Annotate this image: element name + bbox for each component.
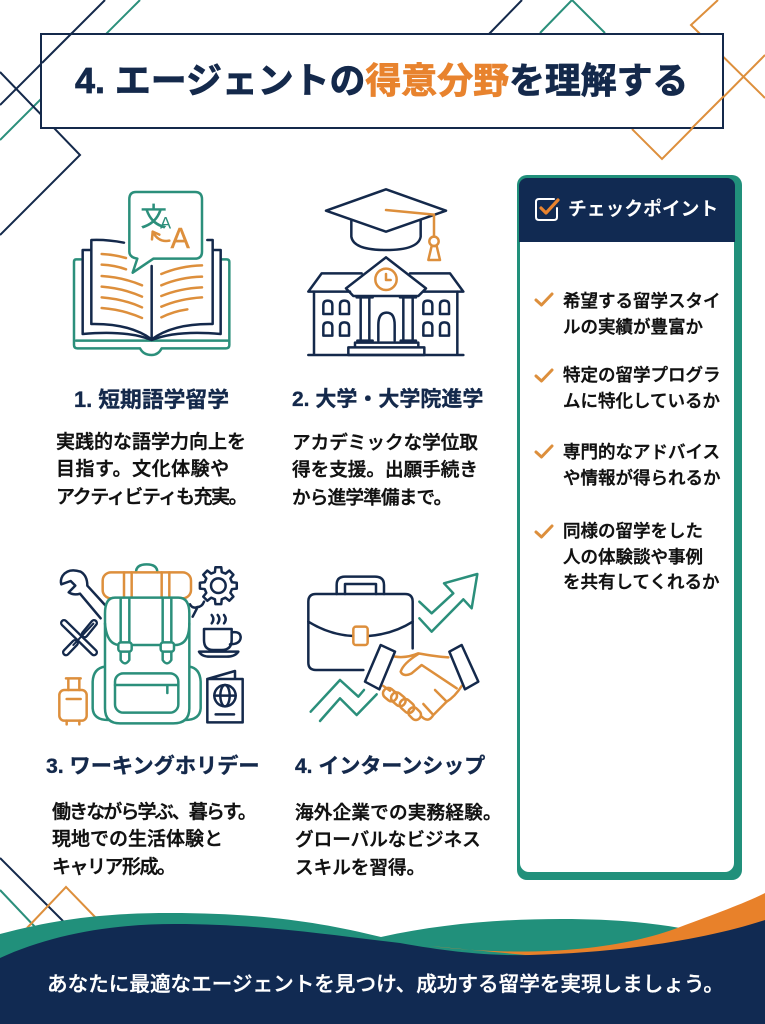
text: university: から進学準備まで。 bbox=[292, 487, 451, 508]
item text bbox=[563, 365, 720, 411]
check item 3 bbox=[534, 442, 720, 488]
item text: 特定の留学プログラ bbox=[563, 365, 720, 385]
text: internship: スキルを習得。 bbox=[295, 857, 425, 878]
heading: internship: 4. インターンシップ bbox=[295, 755, 485, 778]
text: university: アカデミックな学位取 bbox=[292, 432, 478, 453]
item text: 専門的なアドバイス bbox=[563, 442, 720, 462]
text: university: 得を支援。出願手続き bbox=[292, 459, 478, 480]
item text bbox=[563, 521, 720, 592]
item text: や情報が得られるか bbox=[563, 468, 720, 488]
icon: open book with translation bubble: A bbox=[171, 223, 191, 255]
title text: 4. エージェントの得意分野を理解する bbox=[75, 61, 688, 101]
check item 2 bbox=[534, 365, 720, 411]
check item 1 bbox=[534, 291, 720, 337]
footer message: あなたに最適なエージェントを見つけ、成功する留学を実現しましょう。 bbox=[47, 973, 724, 996]
panel: check points bbox=[517, 175, 742, 880]
icon: check bbox=[534, 368, 554, 383]
panel white body bbox=[520, 235, 734, 872]
text: short-term language study: 実践的な語学力向上を bbox=[56, 432, 246, 453]
text: internship bbox=[295, 802, 502, 878]
icon: open book with translation bubble: 文 bbox=[141, 202, 167, 232]
item text: ムに特化しているか bbox=[563, 391, 720, 411]
item text: 希望する留学スタイ bbox=[563, 291, 720, 311]
check item 4 bbox=[534, 521, 720, 592]
heading: working holiday: 3. ワーキングホリデー bbox=[46, 755, 260, 778]
text: working holiday: 現地での生活体験と bbox=[52, 829, 223, 850]
heading: short-term language study: 1. 短期語学留学 bbox=[74, 387, 229, 412]
text: short-term language study: アクティビティも充実。 bbox=[56, 487, 246, 508]
item text: を共有してくれるか bbox=[563, 572, 719, 592]
icon: header checkbox bbox=[535, 198, 560, 221]
item text bbox=[563, 442, 720, 488]
text: internship: 海外企業での実務経験。 bbox=[295, 802, 502, 823]
icon: open book with translation bubble: A bbox=[160, 214, 172, 233]
icon: backpack with tools bbox=[58, 563, 244, 726]
item text: 同様の留学をした bbox=[563, 521, 703, 541]
text: internship: グローバルなビジネス bbox=[295, 829, 481, 850]
text: working holiday: キャリア形成。 bbox=[52, 857, 175, 878]
text: short-term language study bbox=[56, 432, 246, 508]
text: working holiday bbox=[52, 802, 255, 878]
panel header text: チェックポイント bbox=[568, 198, 718, 219]
panel header bbox=[519, 178, 735, 242]
icon: check bbox=[534, 292, 554, 307]
text: university bbox=[292, 432, 478, 508]
icon: check bbox=[534, 444, 554, 459]
item text: 人の体験談や事例 bbox=[563, 547, 703, 567]
title box bbox=[40, 33, 724, 129]
item text bbox=[563, 291, 720, 337]
icon: graduation cap and university bbox=[307, 188, 465, 356]
item text: ルの実績が豊富か bbox=[563, 317, 703, 337]
panel teal shadow bbox=[517, 175, 742, 880]
footer wave banner bbox=[0, 893, 765, 1024]
heading: university: 2. 大学・大学院進学 bbox=[292, 388, 483, 411]
text: short-term language study: 目指す。文化体験や bbox=[56, 459, 230, 480]
text: working holiday: 働きながら学ぶ、暮らす。 bbox=[52, 802, 255, 823]
icon: open book with translation bubble bbox=[72, 190, 231, 356]
icon: briefcase and handshake bbox=[307, 572, 480, 722]
icon: check bbox=[534, 524, 554, 539]
